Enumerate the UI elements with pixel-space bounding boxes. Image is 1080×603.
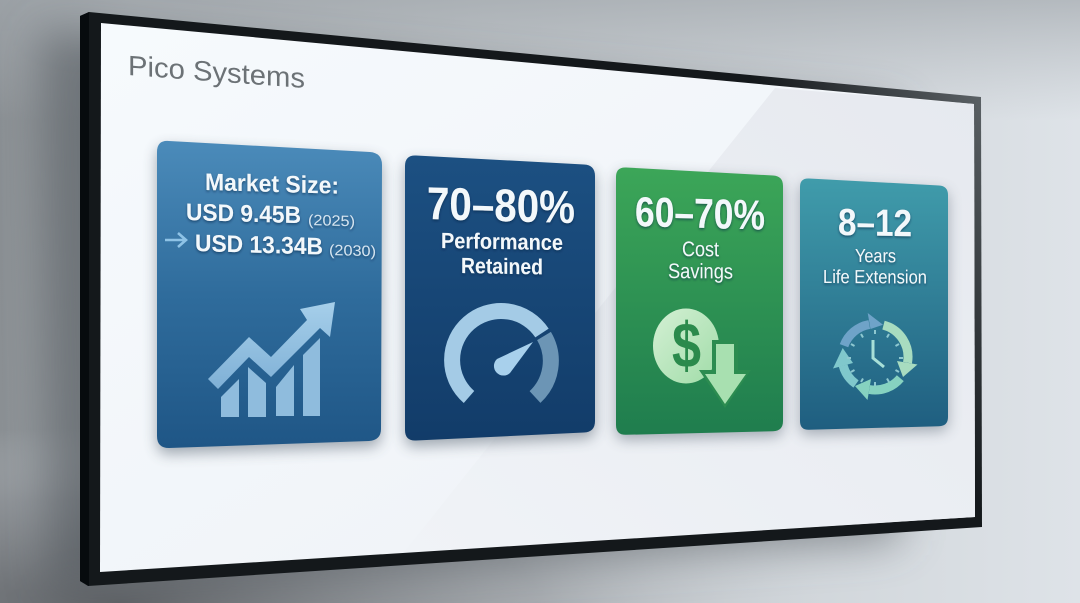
icon: dollar coin with down arrow: $ xyxy=(672,309,701,381)
market size text: Market Size: xyxy=(205,169,339,200)
title: Pico Systems xyxy=(128,50,305,94)
market size text: USD 9.45B xyxy=(186,199,301,229)
screen xyxy=(100,23,975,572)
icon: dollar coin with down arrow xyxy=(653,308,751,408)
monitor shadow on wall xyxy=(40,30,900,590)
arrow: market growth xyxy=(165,233,186,247)
life extension text: Life Extension xyxy=(823,267,927,289)
performance text: 70–80% xyxy=(427,177,575,233)
performance text: Performance xyxy=(441,228,563,255)
life extension text: Years xyxy=(855,246,896,267)
cost savings text: 60–70% xyxy=(635,188,765,239)
market size text: USD 13.34B xyxy=(195,230,323,261)
life extension text: 8–12 xyxy=(838,202,912,245)
performance text xyxy=(427,177,575,279)
panel: life extension xyxy=(800,178,948,435)
cost savings text xyxy=(635,188,765,284)
panel: cost savings xyxy=(616,167,783,440)
market size text xyxy=(186,169,376,261)
market size text: (2030) xyxy=(329,242,376,260)
cost savings text: Cost xyxy=(682,238,719,261)
cost savings text: Savings xyxy=(668,260,733,284)
icon: speedometer gauge xyxy=(452,311,551,397)
panel: market size xyxy=(157,141,382,454)
market size text: (2025) xyxy=(308,212,355,230)
life extension text xyxy=(823,202,927,289)
monitor frame xyxy=(80,12,982,586)
icon: growth chart xyxy=(208,302,335,417)
panel: performance retained xyxy=(405,155,595,447)
performance text: Retained xyxy=(461,253,543,279)
icon: clock with cycle arrows xyxy=(833,313,918,400)
